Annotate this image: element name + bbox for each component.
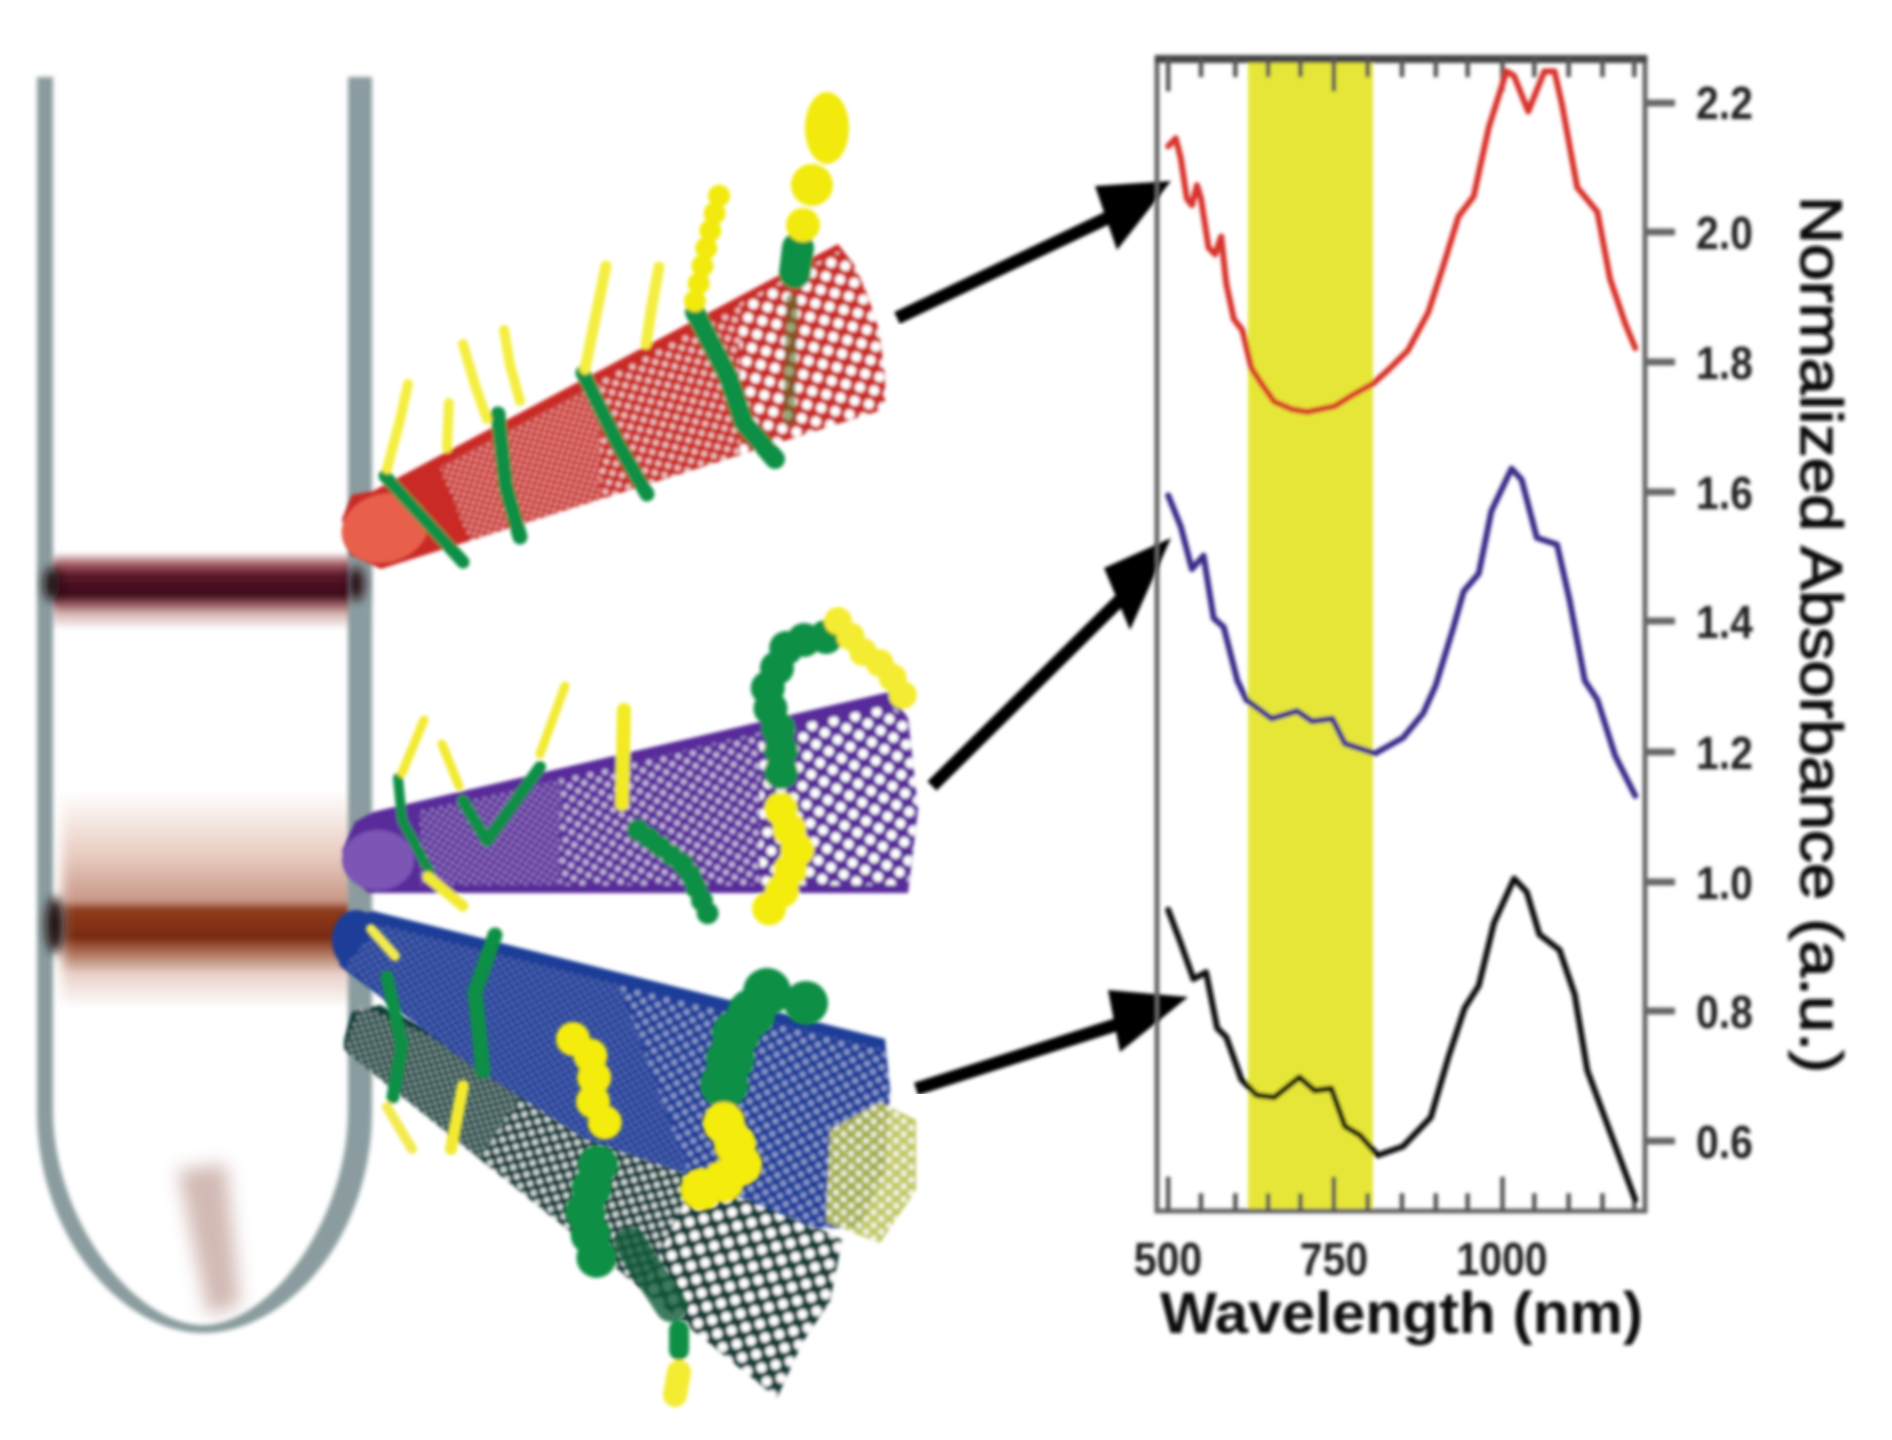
yellow strand left: [371, 929, 395, 956]
bead middle: [791, 164, 833, 206]
tube body: [344, 1005, 842, 1398]
sediment at tube bottom: [178, 1164, 240, 1315]
yellow strand mid: [622, 710, 624, 804]
fine lattice: [420, 779, 560, 885]
fine lattice: [345, 925, 690, 1176]
chart: normalized absorbance spectra: [1134, 58, 1853, 1346]
yellow strands thin: [402, 686, 565, 786]
green wrap five: [795, 248, 798, 273]
tick label 1000: 1000: [1456, 1235, 1548, 1286]
yellow chain right: [693, 1123, 744, 1191]
strand a: [387, 384, 408, 469]
tick label 1.8: 1.8: [1696, 339, 1753, 390]
tick label 1.4: 1.4: [1696, 598, 1753, 649]
dark wall mark at lower band left: [46, 897, 64, 953]
curve: red spectrum: [1168, 71, 1635, 412]
large yellow beads: [786, 92, 849, 242]
green wrap five shadow: [789, 300, 792, 419]
fine lattice: [344, 1005, 530, 1160]
tube body: [342, 244, 885, 569]
tick label 1.0: 1.0: [1696, 859, 1753, 910]
tick label 2.2: 2.2: [1696, 79, 1753, 130]
green strand V: [463, 767, 540, 841]
green bead: [784, 981, 828, 1025]
strand f: [646, 267, 659, 344]
yellow-green lattice: [826, 1102, 916, 1243]
yellow strands: [387, 184, 722, 469]
green wraps: [385, 248, 798, 562]
band: upper dark red: [50, 552, 362, 630]
medium lattice: [480, 1080, 700, 1295]
tick label 0.8: 0.8: [1696, 988, 1753, 1039]
bottom tick marks: [1168, 1177, 1634, 1211]
small yellow-green tube end: [826, 1102, 916, 1243]
strand g: [695, 184, 722, 301]
dark wall mark at upper band right: [348, 567, 364, 601]
tube glass wall: [37, 77, 372, 1333]
medium lattice: [560, 733, 760, 885]
bead top: [805, 92, 849, 164]
medium lattice: [600, 306, 740, 500]
band: lower brown with pale halo: [62, 790, 358, 1020]
bead low: [786, 208, 820, 242]
yellow chain center: [573, 1039, 608, 1128]
nanotube illustration: dark green tube: [344, 1005, 842, 1398]
strand d: [504, 330, 520, 401]
nanotube illustration: blue tube: [332, 910, 916, 1243]
arrow: purple tube to purple spectrum: [932, 538, 1171, 786]
plot frame: [1157, 58, 1645, 1211]
tube opening: [332, 910, 380, 970]
arrow: red tube to red spectrum: [897, 181, 1171, 318]
tick label 750: 750: [1300, 1235, 1368, 1286]
lower green chain: [638, 830, 708, 914]
strand c: [463, 344, 487, 419]
arrow head: [1108, 990, 1188, 1052]
very fine lattice: [440, 382, 600, 541]
large green chain: [765, 637, 826, 778]
arrow head: [1104, 538, 1171, 630]
yellow strand middle: [451, 1086, 463, 1149]
green strand two: [475, 935, 495, 1071]
lower green chain: [585, 1165, 598, 1264]
green wrap one: [385, 476, 463, 562]
right axis numeric labels: [1696, 79, 1753, 1169]
tube body: [342, 692, 918, 893]
curve: black spectrum: [1168, 879, 1635, 1200]
large green chain: [724, 992, 767, 1086]
right axis tick marks: [1647, 103, 1675, 1141]
curve: purple spectrum: [1168, 469, 1635, 796]
coarse lattice: [760, 705, 918, 885]
nanotube illustration: blue and dark tube wrappers: [371, 929, 828, 1395]
coarse lattice: [640, 1170, 842, 1398]
green strand one: [387, 977, 402, 1097]
yellow chain lower: [761, 809, 798, 919]
bottom green stub: [669, 1330, 689, 1350]
yellow strand low: [428, 877, 463, 906]
strand e: [585, 266, 606, 369]
top tick marks: [1168, 58, 1634, 91]
tick label 1.6: 1.6: [1696, 469, 1753, 520]
test tube with separated bands: [37, 77, 372, 1333]
arrow shaft: [916, 1022, 1125, 1089]
green wrap two: [498, 414, 520, 537]
tube body: [334, 911, 890, 1228]
tick label 1.2: 1.2: [1696, 729, 1753, 780]
x axis title: Wavelength (nm): [1160, 1281, 1643, 1346]
green wrap three: [583, 373, 647, 494]
dark wall mark at upper band left: [44, 567, 60, 601]
arrow shaft: [932, 600, 1120, 786]
arrow: blue and dark tubes to black spectrum: [916, 990, 1188, 1089]
x axis numeric labels: [1134, 1235, 1548, 1286]
yellow chain top: [838, 621, 904, 697]
tube opening: [334, 484, 436, 572]
dark green overlay band: [630, 1243, 671, 1306]
y axis title: Normalized Absorbance (a.u.): [1788, 196, 1853, 1073]
highlighted yellow wavelength band: [1248, 58, 1373, 1211]
green wrap four: [695, 312, 775, 459]
yellow bottom stub: [675, 1372, 679, 1395]
tick label 0.6: 0.6: [1696, 1118, 1753, 1169]
medium lattice: [620, 985, 890, 1228]
tick label 500: 500: [1134, 1235, 1202, 1286]
arrow shaft: [897, 212, 1120, 318]
green strand left: [398, 778, 430, 872]
arrow head: [1095, 181, 1171, 250]
strand b: [447, 403, 449, 448]
nanotube illustration: purple tube: [342, 621, 918, 919]
yellow strand lower left: [387, 1107, 412, 1149]
tick label 2.0: 2.0: [1696, 209, 1753, 260]
frame top edge: [1155, 55, 1647, 63]
tube opening: [342, 830, 414, 890]
nanotube illustration: red tube: [334, 92, 885, 572]
coarse lattice: [740, 252, 885, 456]
